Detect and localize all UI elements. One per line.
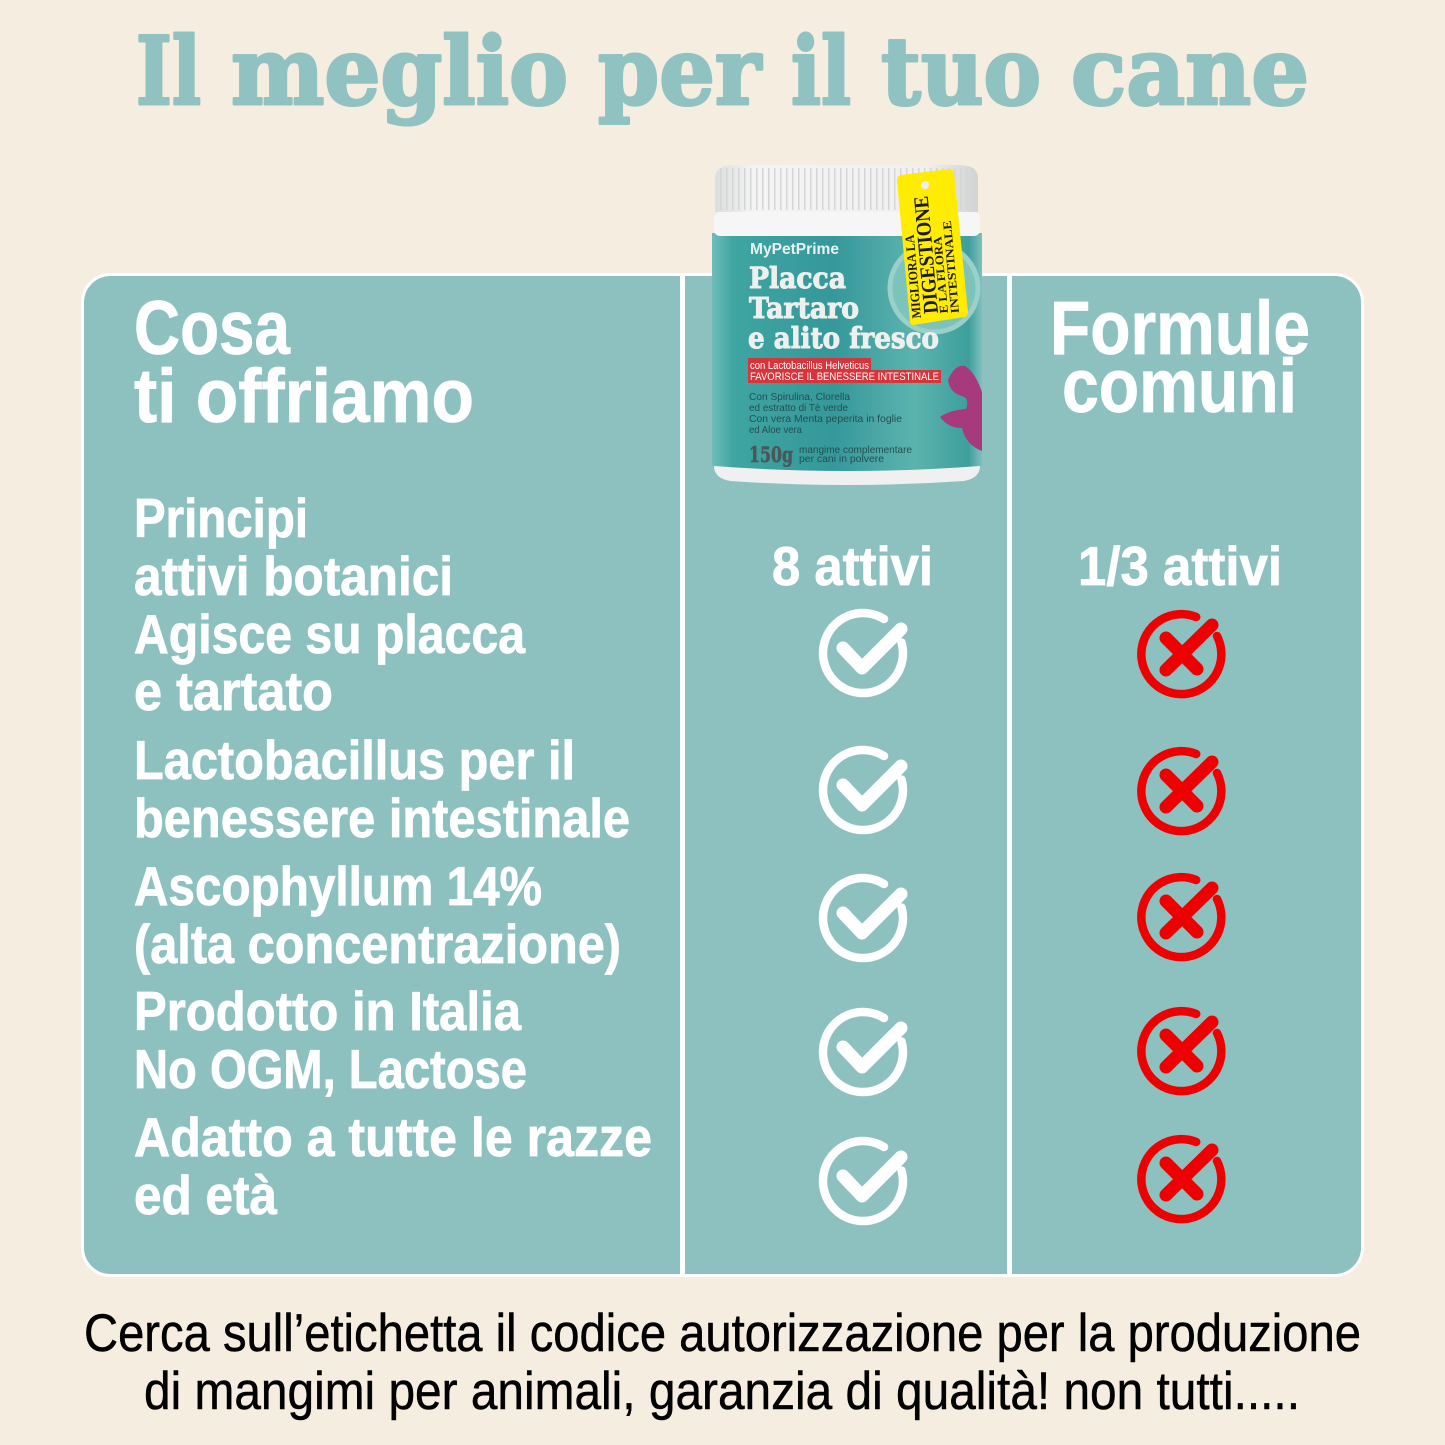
- heading: cosa ti offriamo: ti offriamo: [134, 354, 474, 439]
- icon: check 2: [823, 750, 903, 830]
- icon: check 4: [823, 1012, 903, 1092]
- panel: comparison table: [82, 274, 1362, 1276]
- icon: cross 2: [1141, 751, 1221, 831]
- seal: [890, 244, 978, 332]
- icon: check 1: [823, 613, 903, 693]
- dog illustration: [940, 366, 982, 451]
- yellow tag: E LA FLORA: [930, 236, 951, 314]
- jar base: [714, 466, 980, 485]
- title: Il: [136, 17, 201, 127]
- heading: formule comuni: Formule: [1050, 286, 1310, 371]
- yellow tag: INTESTINALE: [940, 220, 962, 314]
- product name: Placca: [749, 261, 846, 295]
- heading: formule comuni: comuni: [1062, 344, 1297, 429]
- title: per: [598, 17, 762, 127]
- yellow tag: [897, 169, 968, 325]
- red label: [748, 358, 941, 383]
- row labels: attivi botanici: [134, 545, 453, 607]
- title: meglio: [231, 17, 568, 127]
- red label: FAVORISCE IL BENESSERE INTESTINALE: [750, 371, 939, 383]
- title: tuo: [881, 17, 1041, 127]
- icon: check 3: [823, 878, 903, 958]
- title: [136, 17, 1309, 127]
- product type: mangime complementare: [799, 444, 912, 456]
- yellow tag: MIGLIORA LA: [902, 233, 924, 319]
- product name: [748, 261, 939, 355]
- row labels: Ascophyllum 14%: [134, 855, 542, 917]
- row labels: Agisce su placca: [134, 603, 525, 665]
- net weight: 150g: [749, 442, 793, 467]
- ingredients: ed estratto di Tè verde: [749, 402, 848, 414]
- row labels: ed età: [134, 1164, 277, 1226]
- ingredients: Con vera Menta peperita in foglie: [749, 413, 902, 425]
- product type: per cani in polvere: [799, 453, 884, 465]
- row labels: [134, 487, 652, 1226]
- footer note: di mangimi per animali, garanzia di qualità! non tutti.....: [144, 1362, 1300, 1421]
- title: il: [791, 17, 851, 127]
- product type: [799, 444, 912, 465]
- icon: check 5: [823, 1141, 903, 1221]
- active count: product: 8 attivi: [772, 535, 933, 597]
- title: cane: [1071, 17, 1309, 127]
- jar lid: [715, 165, 978, 212]
- icon: cross 4: [1141, 1011, 1221, 1091]
- icon: cross 3: [1141, 877, 1221, 957]
- product name: Tartaro: [749, 291, 859, 325]
- footer note: [84, 1304, 1361, 1421]
- row labels: benessere intestinale: [134, 787, 630, 849]
- heading: formule comuni: [1050, 286, 1310, 429]
- active count: common formulas: 1/3 attivi: [1078, 535, 1282, 597]
- brand: MyPetPrime: [750, 241, 839, 258]
- heading: cosa ti offriamo: Cosa: [134, 286, 291, 371]
- jar body: [712, 233, 982, 481]
- ingredients: Con Spirulina, Clorella: [749, 391, 850, 403]
- jar neck: [714, 212, 980, 236]
- product name: e alito fresco: [748, 321, 939, 355]
- row labels: No OGM, Lactose: [134, 1038, 527, 1100]
- icon: cross 5: [1141, 1139, 1221, 1219]
- product jar: [712, 165, 982, 485]
- row labels: Principi: [134, 487, 308, 549]
- heading: cosa ti offriamo: [134, 286, 474, 439]
- row labels: (alta concentrazione): [134, 913, 621, 975]
- red label: con Lactobacillus Helveticus: [750, 360, 869, 372]
- row labels: Prodotto in Italia: [134, 980, 521, 1042]
- ingredients: ed Aloe vera: [749, 424, 802, 436]
- row labels: e tartato: [134, 660, 333, 722]
- row labels: Lactobacillus per il: [134, 729, 575, 791]
- ingredients: [749, 391, 902, 436]
- icon: cross 1: [1141, 614, 1221, 694]
- yellow tag: DIGESTIONE: [909, 195, 943, 315]
- row labels: Adatto a tutte le razze: [134, 1106, 652, 1168]
